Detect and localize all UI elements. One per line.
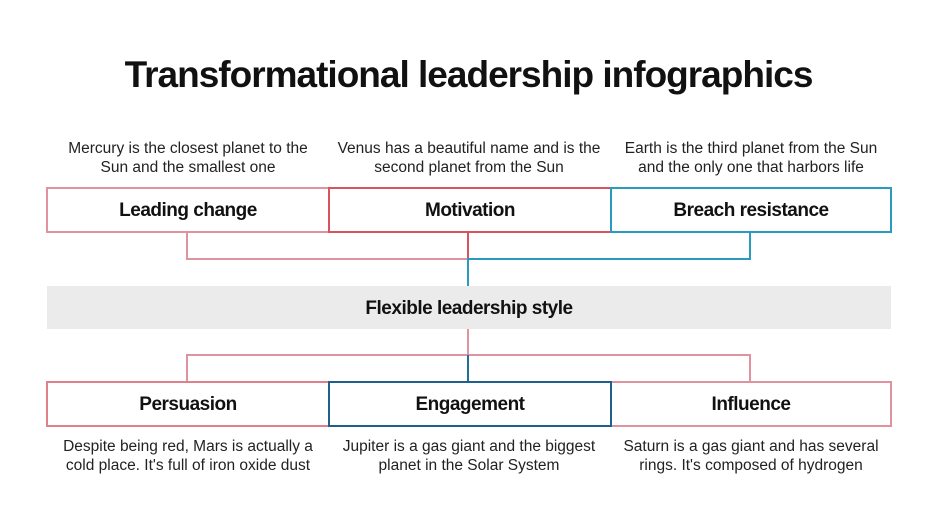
box: leading change xyxy=(46,187,330,233)
box: leading change: Leading change xyxy=(119,200,257,221)
box: engagement xyxy=(328,381,612,427)
text: saturn: Saturn is a gas giant and has several rings. It's composed of hydrogen xyxy=(623,438,879,474)
box: motivation xyxy=(328,187,612,233)
band: flexible leadership style: Flexible leadership style xyxy=(365,298,573,318)
box: influence xyxy=(610,381,892,427)
box: breach resistance xyxy=(610,187,892,233)
box: influence: Influence xyxy=(712,394,790,415)
text: venus: Venus has a beautiful name and is the second planet from the Sun xyxy=(338,140,600,176)
text: jupiter: Jupiter is a gas giant and the biggest planet in the Solar System xyxy=(343,438,595,474)
box: persuasion: Persuasion xyxy=(139,394,237,415)
text: mercury: Mercury is the closest planet to the Sun and the smallest one xyxy=(68,140,308,176)
box: motivation: Motivation xyxy=(425,200,515,221)
text: earth: Earth is the third planet from the Sun and the only one that harbors life xyxy=(625,140,877,176)
box: engagement: Engagement xyxy=(415,394,525,415)
box: breach resistance: Breach resistance xyxy=(673,200,829,221)
text: mars: Despite being red, Mars is actually a cold place. It's full of iron oxide dust xyxy=(63,438,313,474)
title: Transformational leadership infographics xyxy=(125,54,812,95)
band: flexible leadership style xyxy=(47,286,891,329)
box: persuasion xyxy=(46,381,330,427)
